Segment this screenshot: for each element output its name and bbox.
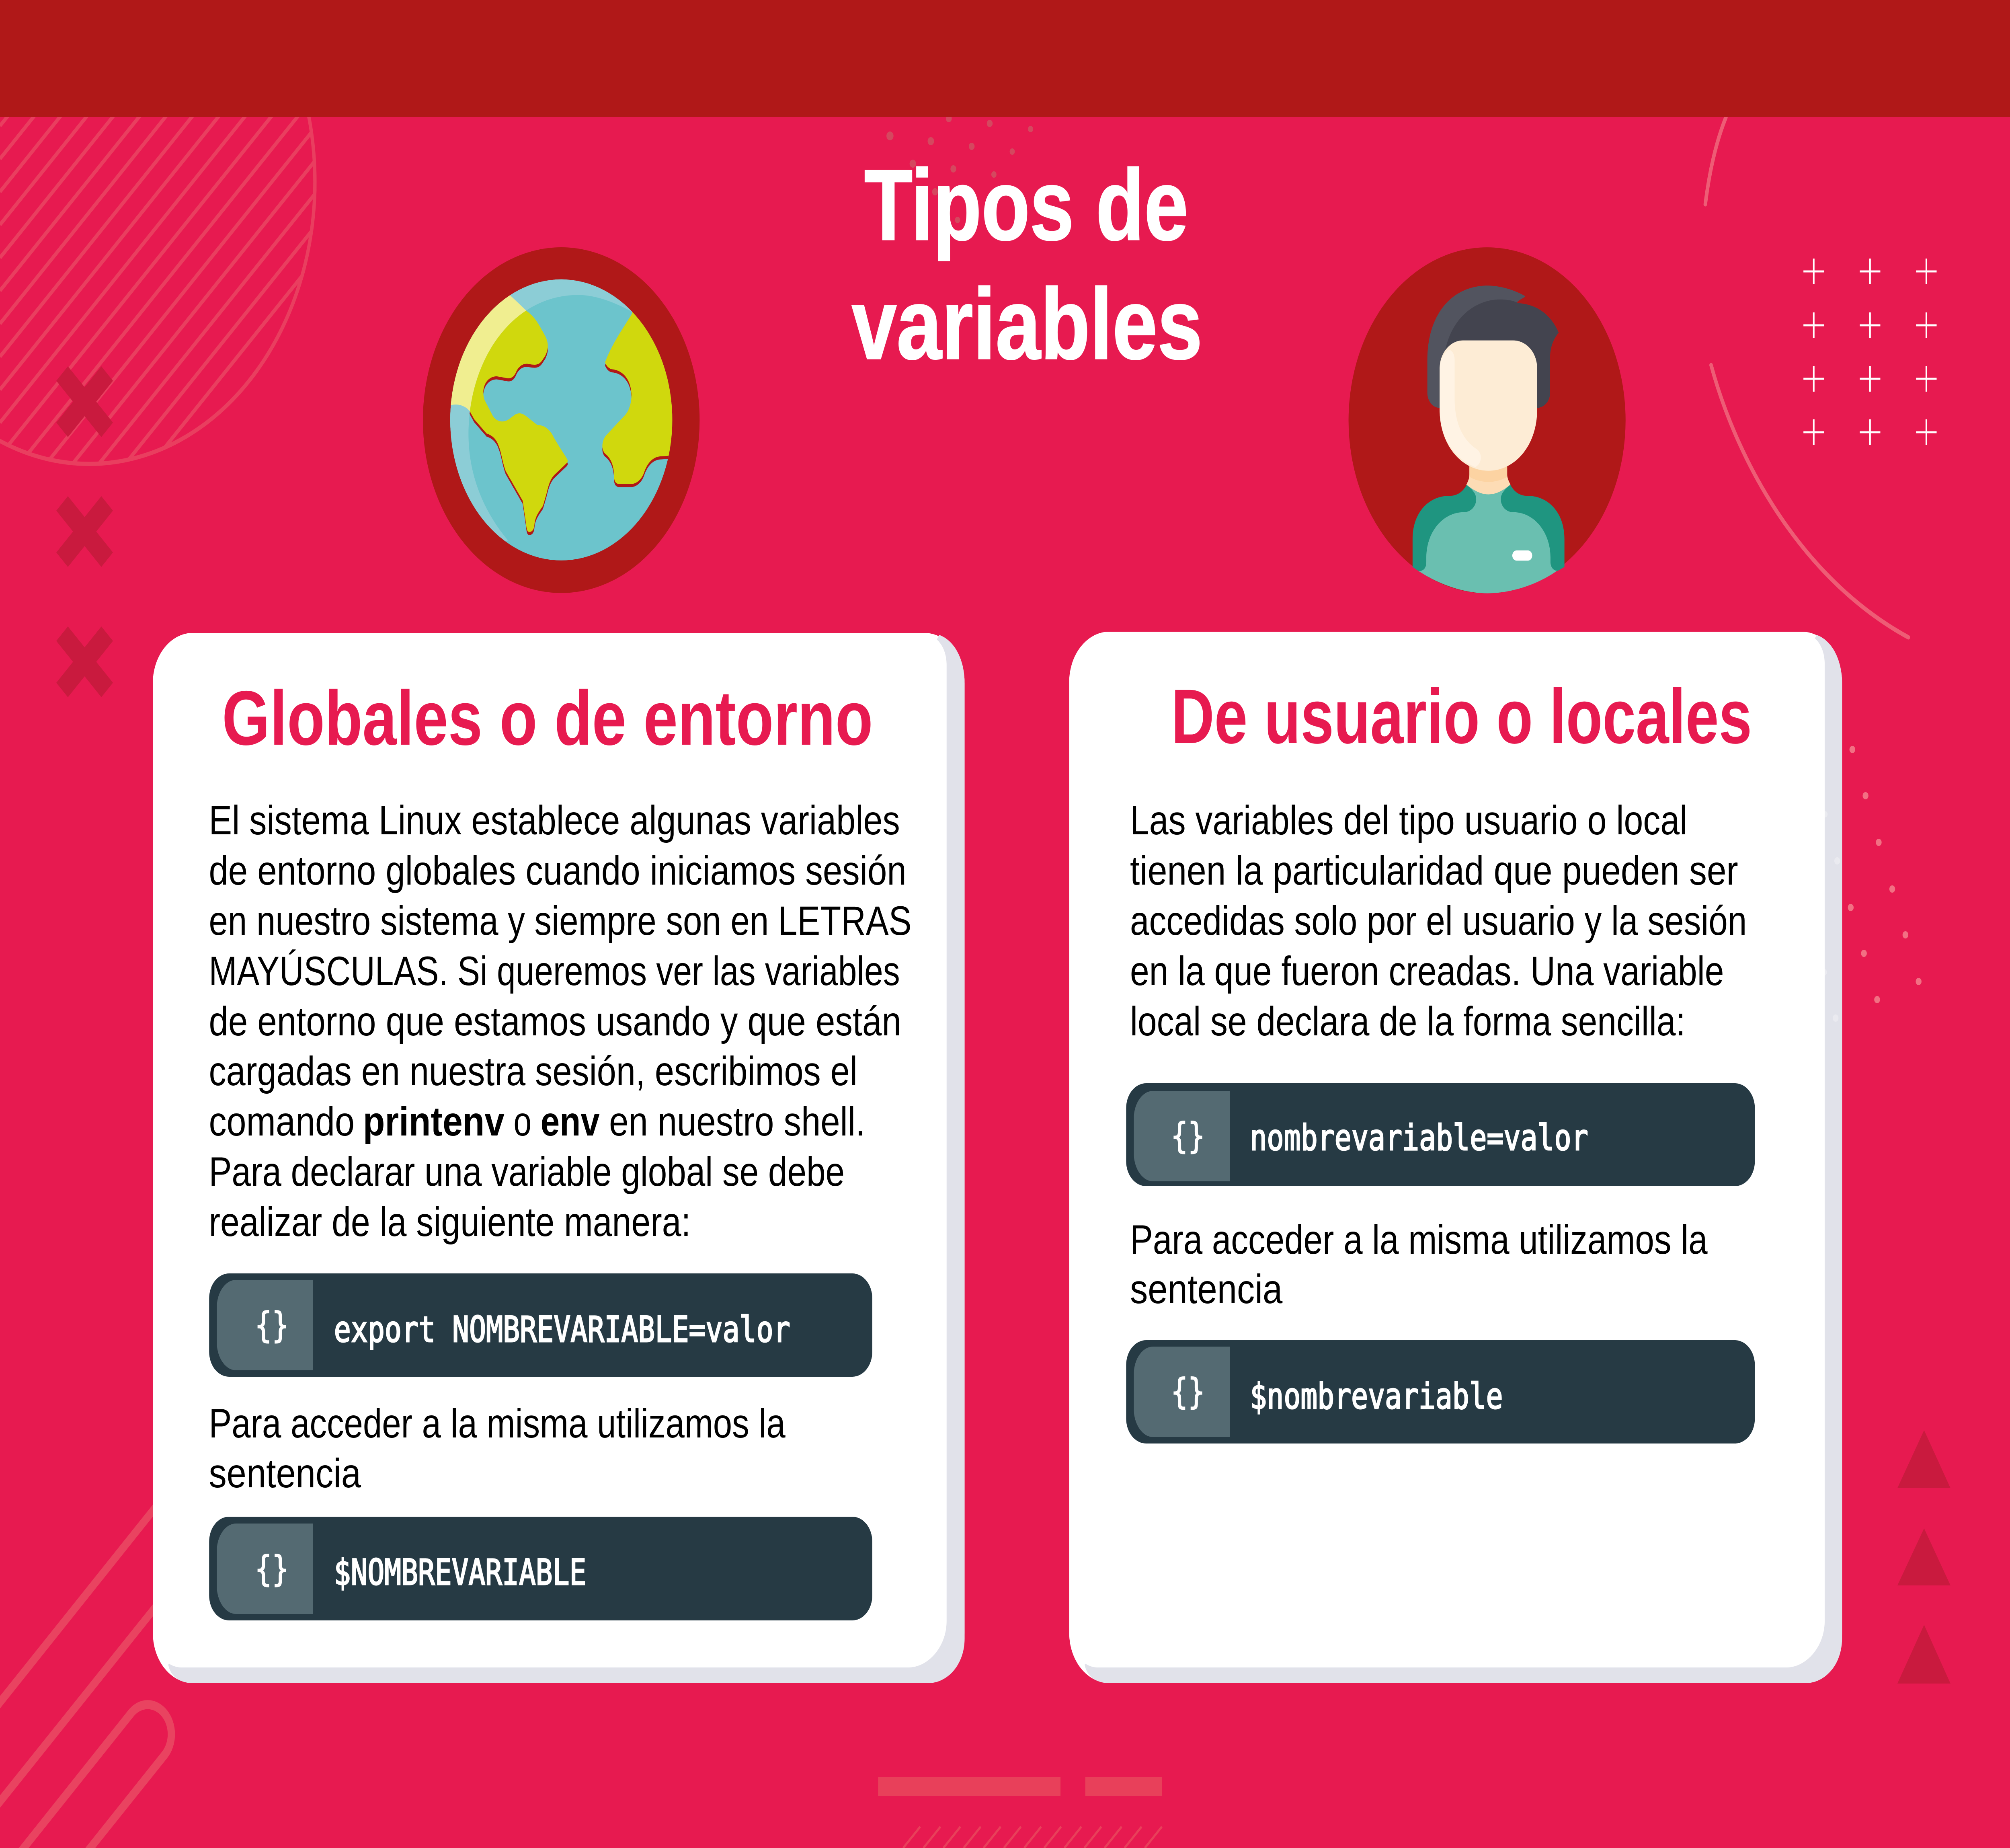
text: para acceder: Para acceder a la misma utilizamos la	[209, 1400, 786, 1446]
decoration: bottom hatch	[903, 1827, 1162, 1848]
code box: nombrevariable=valor	[1126, 1083, 1755, 1186]
text: para acceder	[209, 1400, 786, 1496]
body text: Para declarar una variable global se debe	[209, 1148, 845, 1195]
text: para acceder	[1130, 1216, 1708, 1312]
body text: o	[513, 1098, 531, 1144]
text: para acceder: sentencia	[209, 1450, 361, 1496]
body text: realizar de la siguiente manera:	[209, 1199, 691, 1245]
code box: $nombrevariable: $nombrevariable	[1250, 1376, 1503, 1417]
body text: local se declara de la forma sencilla:	[1130, 998, 1685, 1044]
body text: de entorno que estamos usando y que están	[209, 998, 901, 1044]
decoration: bottom-left stripes and loop	[0, 1505, 175, 1848]
body text: env	[541, 1098, 600, 1144]
decoration: top dots	[886, 115, 1033, 223]
body text: comando	[209, 1098, 355, 1144]
body text: en nuestro shell.	[609, 1098, 865, 1144]
decoration: triangles	[1897, 1430, 1951, 1684]
code box: $NOMBREVARIABLE	[209, 1517, 872, 1620]
body text: El sistema Linux establece algunas variables	[209, 797, 900, 843]
body text	[209, 797, 911, 1245]
title: Tipos de	[864, 149, 1188, 261]
decoration: faint dots on card edge	[1822, 811, 1840, 1022]
icon: globe	[409, 247, 702, 593]
decoration: three crosses	[62, 374, 107, 690]
code box: export: export NOMBREVARIABLE=valor	[334, 1309, 790, 1350]
decoration: right arcs	[1705, 117, 1908, 637]
code box: $nombrevariable	[1126, 1340, 1755, 1443]
body text: de entorno globales cuando iniciamos sesión	[209, 847, 907, 893]
body text: en nuestro sistema y siempre son en LETRAS	[209, 897, 911, 944]
body text: accedidas solo por el usuario y la sesión	[1130, 897, 1747, 944]
code box: $NOMBREVARIABLE: $NOMBREVARIABLE	[334, 1552, 586, 1593]
text: para acceder: Para acceder a la misma utilizamos la	[1130, 1216, 1708, 1263]
body text	[1130, 797, 1747, 1044]
code box: nombrevariable=valor: nombrevariable=valor	[1250, 1117, 1588, 1158]
code box: nombrevariable=valor: {}	[1171, 1115, 1205, 1156]
body text: Las variables del tipo usuario o local	[1130, 797, 1687, 843]
title: variables	[852, 268, 1202, 380]
title	[852, 149, 1202, 380]
code box: export: {}	[255, 1304, 289, 1346]
icon: person avatar	[1349, 247, 1626, 593]
body text: en la que fueron creadas. Una variable	[1130, 948, 1724, 994]
body text: MAYÚSCULAS. Si queremos ver las variables	[209, 948, 900, 994]
panel: de usuario o locales	[1069, 632, 1842, 1683]
decoration: right dots	[1848, 746, 1922, 1003]
top bar	[0, 0, 2010, 117]
decoration: bottom bars	[878, 1777, 1162, 1796]
code box: $nombrevariable: {}	[1171, 1371, 1205, 1412]
code box: export	[209, 1273, 872, 1377]
heading: De usuario o locales	[1171, 673, 1752, 760]
panel: globales o de entorno	[153, 633, 965, 1683]
text: para acceder: sentencia	[1130, 1266, 1283, 1312]
code box: $NOMBREVARIABLE: {}	[255, 1548, 289, 1589]
decoration: plus grid	[1803, 259, 1937, 445]
body text: printenv	[363, 1098, 505, 1144]
heading: Globales o de entorno	[222, 675, 873, 761]
body text: tienen la particularidad que pueden ser	[1130, 847, 1738, 893]
body text: cargadas en nuestra sesión, escribimos el	[209, 1048, 857, 1094]
decoration: hatched circle	[0, 117, 317, 466]
